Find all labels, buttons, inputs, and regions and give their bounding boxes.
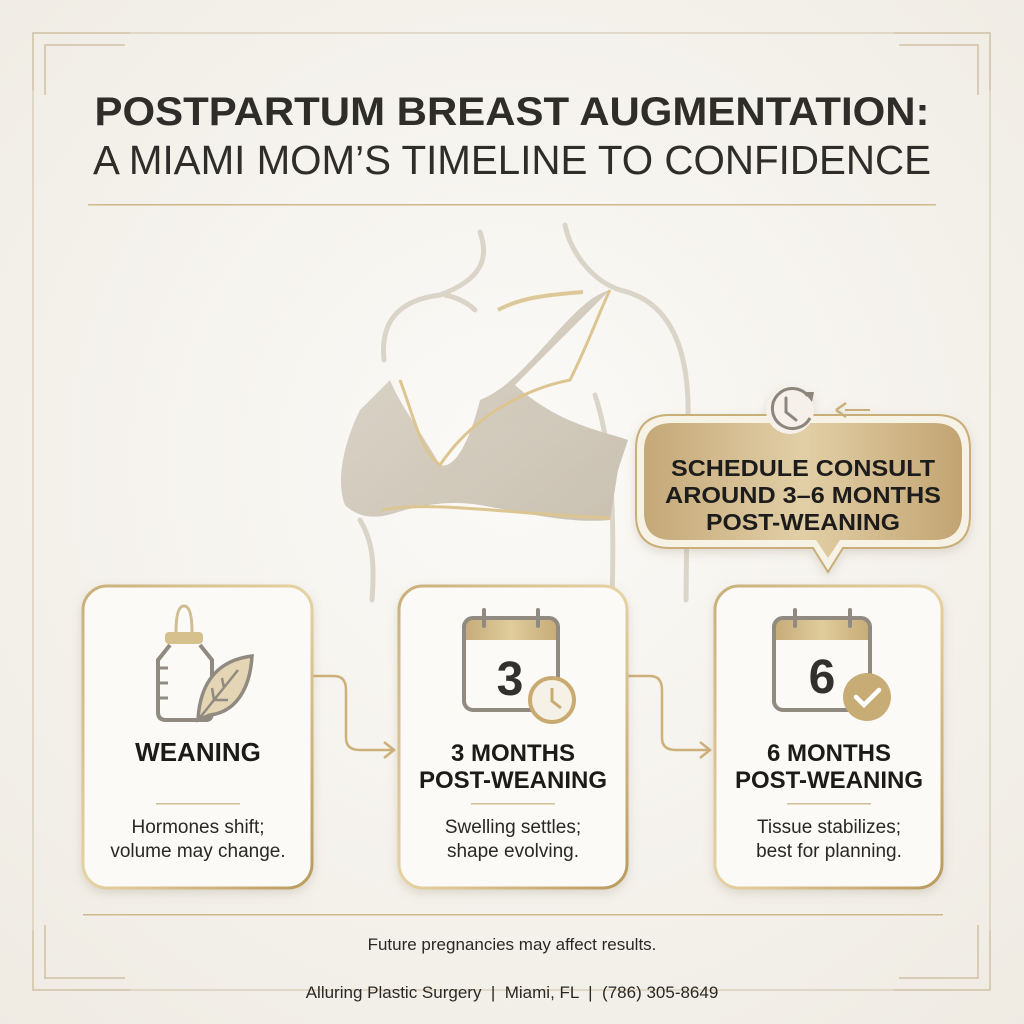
icon: bottle and leaf (158, 606, 252, 720)
callout text: POST-WEANING (706, 509, 900, 535)
footer: Alluring Plastic Surgery | Miami, FL | (786) 305-8649 (306, 983, 718, 1002)
card: weaning: volume may change. (110, 841, 286, 862)
callout text (665, 455, 941, 535)
disclaimer: Future pregnancies may affect results. (368, 935, 656, 954)
icon: calendar 6 with check (774, 610, 891, 721)
bra cups (341, 290, 628, 521)
icon: clock (766, 386, 870, 434)
callout text: AROUND 3–6 MONTHS (665, 482, 941, 508)
callout (636, 386, 970, 572)
card: 3 months: Swelling settles; (445, 817, 581, 838)
card: 3 months: shape evolving. (447, 841, 579, 862)
card: 6 months: POST-WEANING (735, 767, 923, 794)
card: 3 months: POST-WEANING (419, 767, 607, 794)
card: weaning (83, 586, 312, 888)
icon: calendar 3 with clock: 3 (497, 653, 523, 706)
card: 6 months (715, 586, 942, 888)
title (93, 90, 931, 183)
title: POSTPARTUM BREAST AUGMENTATION: (94, 90, 930, 134)
card: 3 months (399, 586, 627, 888)
arrow: weaning to 3 months (312, 676, 394, 758)
title: A MIAMI MOM’S TIMELINE TO CONFIDENCE (93, 137, 931, 183)
card: 6 months: Tissue stabilizes; (757, 817, 901, 838)
icon: calendar 3 with clock (464, 610, 574, 722)
card: 6 months: best for planning. (756, 841, 902, 862)
arrow: 3 months to 6 months (627, 676, 710, 758)
icon: calendar 6 with check: 6 (809, 651, 835, 704)
illustration: silhouette with bra (341, 225, 688, 600)
callout text: SCHEDULE CONSULT (671, 455, 935, 481)
card: 3 months: 3 MONTHS (451, 740, 575, 767)
card: 6 months: 6 MONTHS (767, 740, 891, 767)
card: weaning: WEANING (135, 737, 261, 767)
card: weaning: Hormones shift; (131, 817, 265, 838)
